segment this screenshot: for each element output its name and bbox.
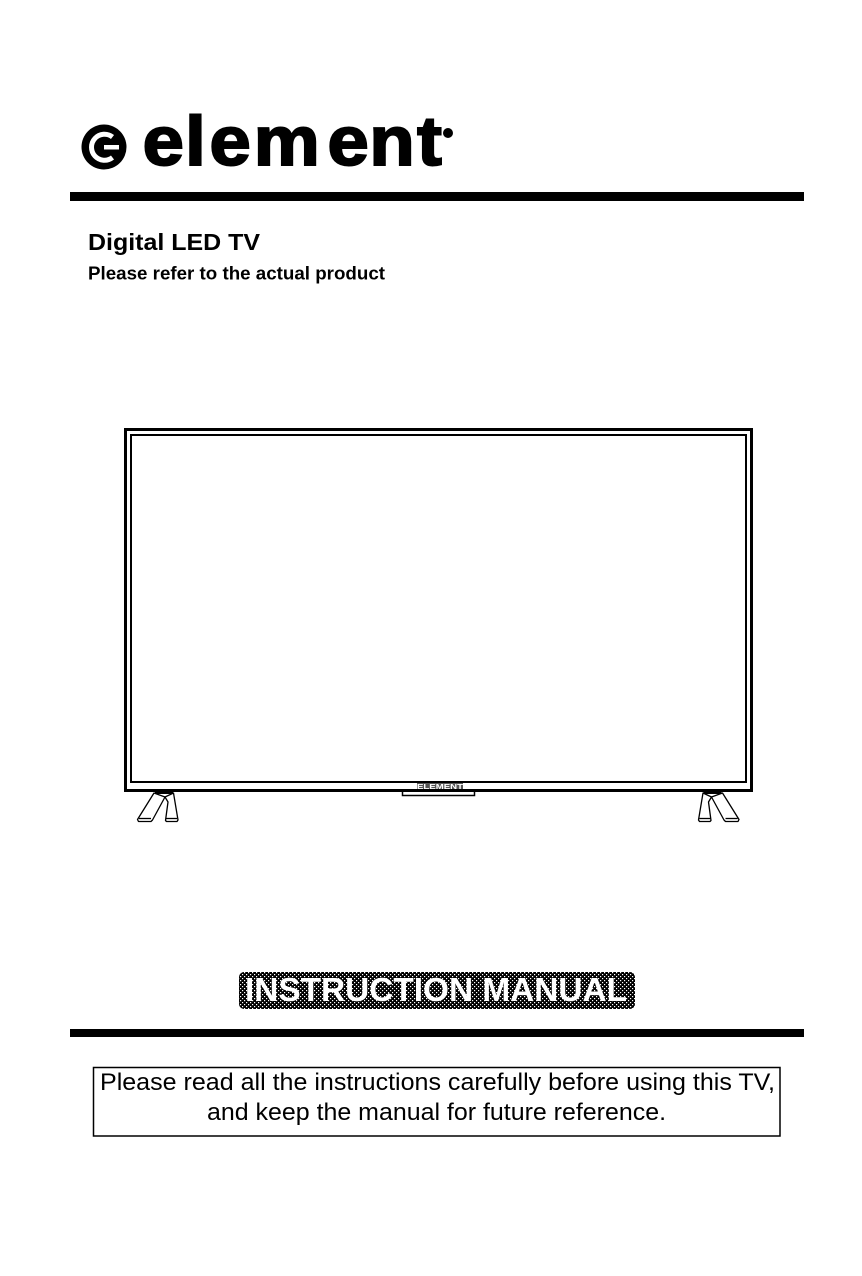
brand logo: [82, 103, 453, 181]
manual title banner: [239, 972, 635, 1009]
notice line two: and keep the manual for future reference.: [207, 1099, 666, 1126]
icon: logo power-style circle: [82, 124, 126, 170]
notice box: [94, 1068, 780, 1136]
heading: product name: Digital LED TV: [88, 229, 261, 255]
logo registered dot: [443, 128, 453, 138]
TV illustration: [126, 430, 752, 822]
logo wordmark: element: [143, 103, 442, 181]
TV screen: [131, 435, 746, 782]
bottom rule: [70, 1029, 804, 1037]
TV center foot bar: [402, 792, 474, 796]
notice border: [94, 1068, 780, 1136]
subheading: product note: Please refer to the actual product: [88, 264, 385, 284]
notice line one: Please read all the instructions carefully before using this TV,: [100, 1069, 775, 1096]
left stand: [138, 792, 178, 822]
banner title: INSTRUCTION MANUAL: [245, 972, 627, 1009]
right stand: [698, 792, 739, 822]
top rule: [70, 192, 804, 201]
TV outer frame: [126, 430, 752, 790]
TV brand label: ELEMENT: [417, 782, 464, 791]
banner dithered background: [239, 972, 635, 1009]
